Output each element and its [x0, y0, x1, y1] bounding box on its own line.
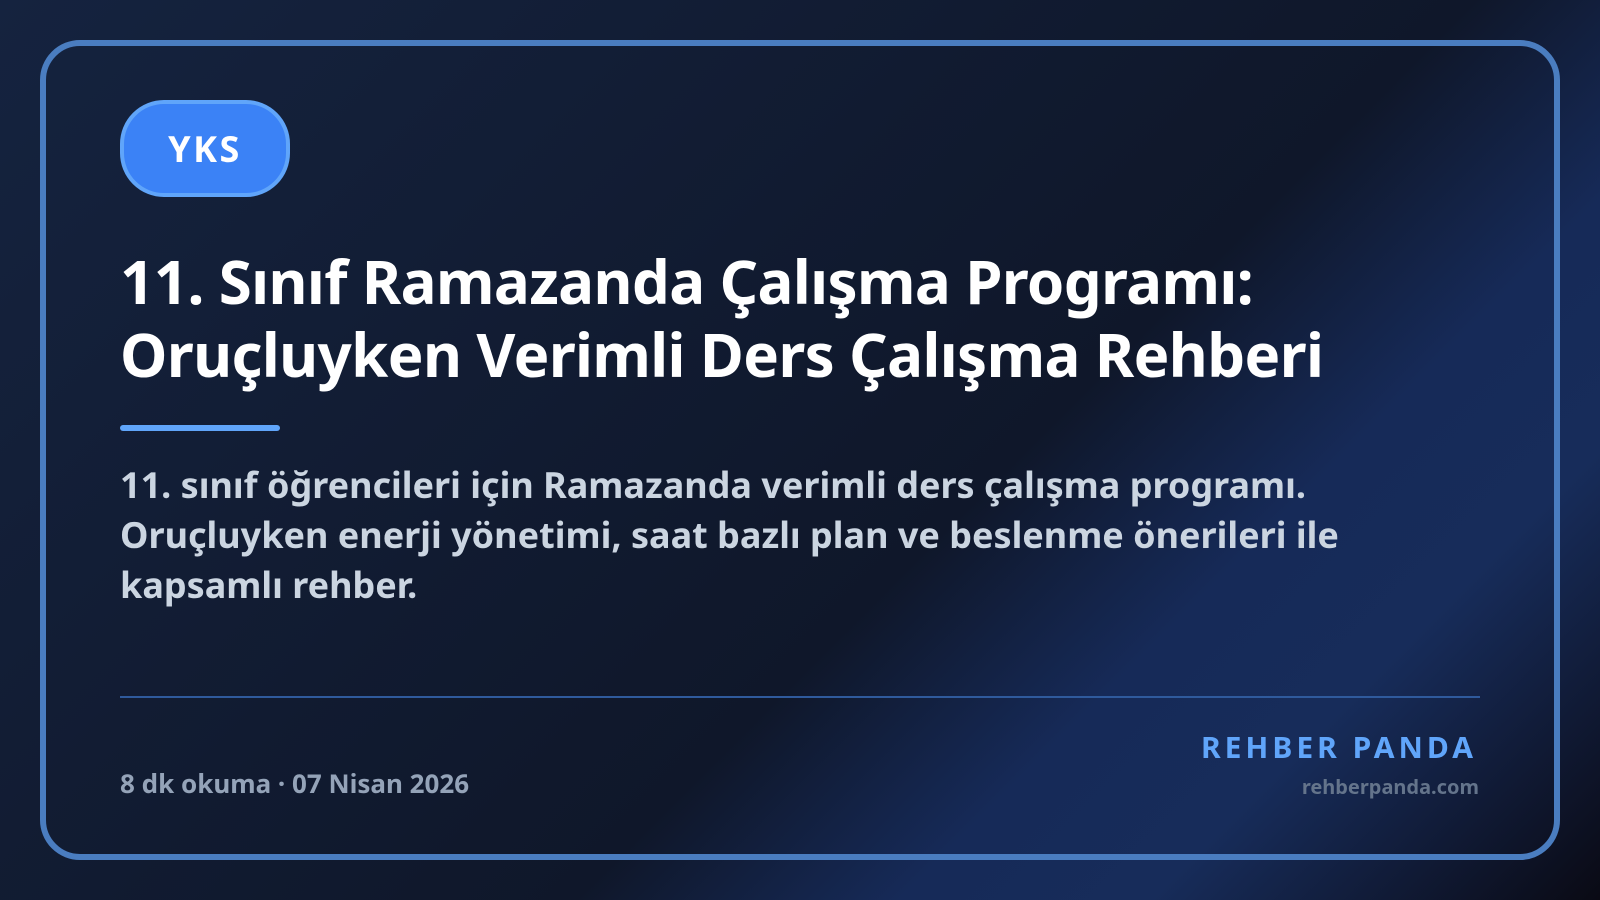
- description text: kapsamlı rehber.: [120, 560, 417, 609]
- title: 11. Sınıf Ramazanda Çalışma Programı:: [120, 240, 1253, 322]
- title: Oruçluyken Verimli Ders Çalışma Rehberi: [120, 313, 1323, 395]
- title: [120, 240, 1323, 395]
- description text: [120, 460, 1339, 609]
- category badge: [120, 100, 290, 197]
- footer divider: [120, 696, 1480, 698]
- brand name: REHBER PANDA: [1201, 726, 1477, 767]
- description text: 11. sınıf öğrencileri için Ramazanda verimli ders çalışma programı.: [120, 460, 1306, 509]
- accent rule: [120, 425, 280, 431]
- category badge: YKS: [168, 124, 242, 173]
- reading time and date: 8 dk okuma · 07 Nisan 2026: [120, 765, 469, 801]
- description text: Oruçluyken enerji yönetimi, saat bazlı plan ve beslenme önerileri ile: [120, 510, 1339, 559]
- website address: rehberpanda.com: [1302, 773, 1479, 800]
